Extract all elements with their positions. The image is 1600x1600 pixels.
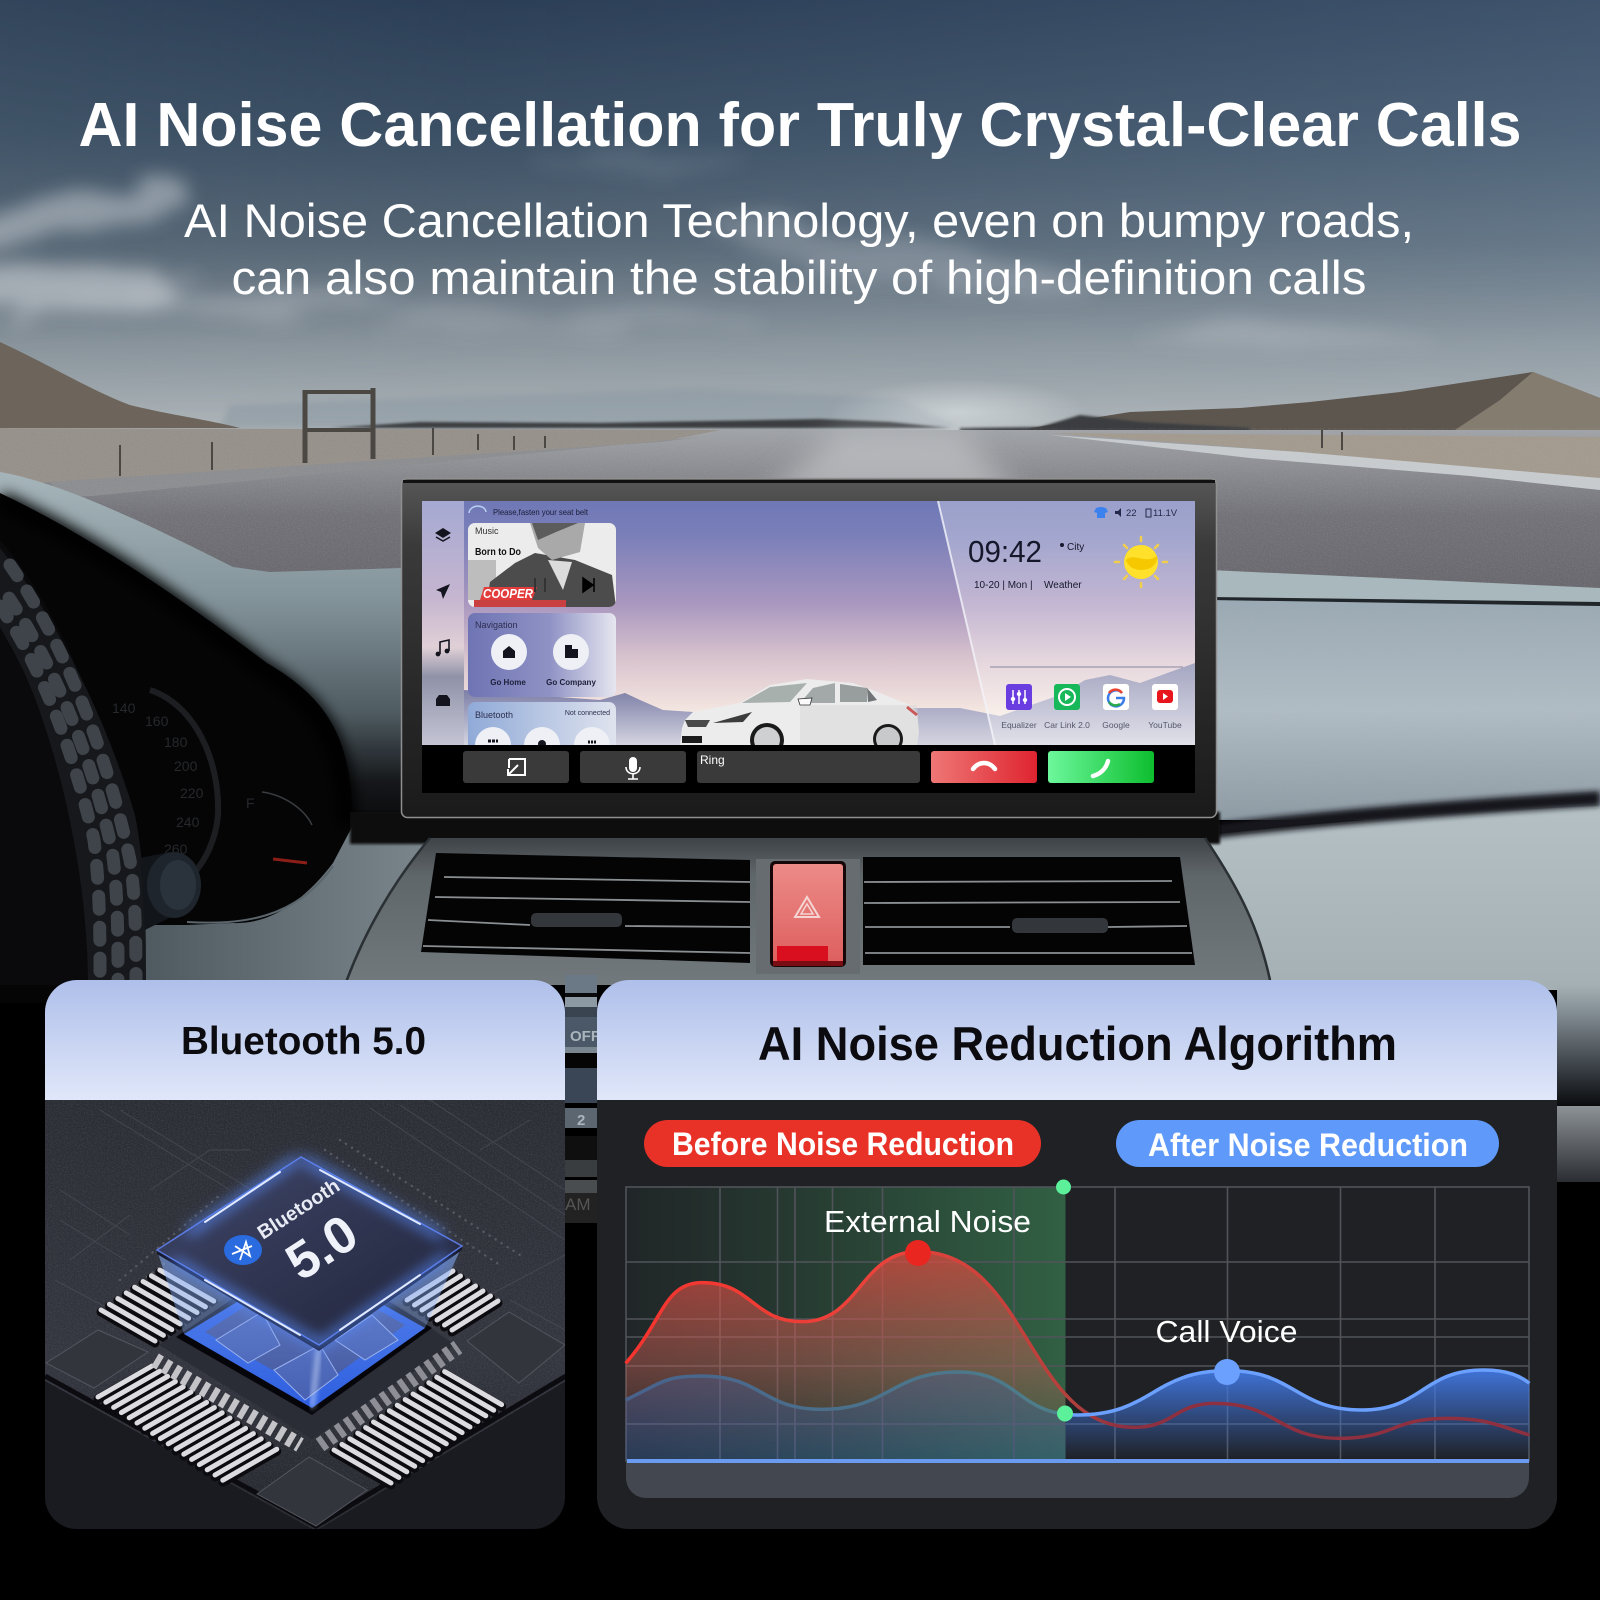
car display device	[402, 478, 1216, 818]
subtitle: AI Noise Cancellation Technology, even on bumpy roads,	[184, 194, 1414, 247]
stalk knob	[140, 852, 201, 930]
clock and weather: 10-20 | Mon |	[974, 580, 1033, 591]
main title: AI Noise Cancellation for Truly Crystal-Clear Calls	[78, 91, 1522, 160]
gauge arc and fuel	[150, 690, 333, 923]
speedometer markings: 160	[145, 713, 169, 729]
bluetooth header	[45, 980, 565, 1100]
lower console between the cards: AM	[565, 1195, 590, 1214]
left field and curb	[0, 428, 720, 487]
app labels: Equalizer	[1001, 720, 1037, 730]
divider	[990, 666, 1183, 668]
speedometer markings: 240	[176, 814, 200, 830]
speedometer markings: 260	[164, 841, 188, 857]
clock and weather: Weather	[1044, 580, 1082, 591]
music card	[468, 523, 616, 607]
call voice label	[1156, 1314, 1298, 1385]
base chip frame	[160, 1298, 452, 1438]
background photo: sky and landscape	[0, 0, 1600, 620]
tree line	[330, 415, 1250, 436]
after pill	[1116, 1120, 1499, 1167]
external noise label	[824, 1204, 1031, 1266]
subtitle	[184, 194, 1414, 304]
ring status field	[697, 751, 920, 783]
bluetooth header: Bluetooth 5.0	[181, 1020, 426, 1063]
right side fade	[1557, 985, 1600, 1182]
translucent right panel	[938, 501, 1195, 745]
bluetooth card	[468, 702, 616, 745]
cast button	[463, 751, 569, 783]
app labels	[1002, 722, 1182, 730]
steering wheel	[0, 540, 146, 985]
fence	[120, 388, 1342, 476]
vent frame	[345, 838, 1271, 985]
road	[0, 430, 1600, 620]
screen wallpaper	[422, 501, 1195, 763]
left air vent	[421, 853, 750, 963]
green comparison zone	[626, 1187, 1066, 1461]
chip illustration	[45, 1100, 566, 1531]
right top trim	[1210, 570, 1600, 606]
status bar	[1094, 507, 1178, 519]
sidebar icons	[435, 528, 451, 706]
blue die	[184, 1302, 425, 1408]
answer call button	[1048, 751, 1154, 783]
panel: AI Noise Reduction Algorithm	[597, 980, 1557, 1529]
app labels: Car Link 2.0	[1044, 720, 1090, 730]
sidebar	[422, 501, 464, 745]
call control bar	[422, 745, 1195, 793]
call voice label: Call Voice	[1156, 1314, 1298, 1349]
end call button	[931, 751, 1037, 783]
clock and weather: City	[1067, 542, 1084, 553]
light cones	[157, 1250, 319, 1408]
speedometer markings: 180	[164, 734, 188, 750]
bezel	[402, 478, 1216, 818]
chip logo: 5.0	[276, 1204, 368, 1292]
speedometer markings: 140	[112, 700, 136, 716]
lower platform	[45, 1381, 566, 1531]
blue voice area right	[1028, 1370, 1529, 1460]
after pill: After Noise Reduction	[1148, 1127, 1468, 1163]
hazard button	[756, 859, 860, 974]
small chips	[46, 1312, 565, 1526]
panel: Bluetooth 5.0	[45, 980, 566, 1531]
music card: Music	[475, 526, 499, 536]
lower console between the cards: OFF	[570, 1028, 600, 1045]
wallpaper mountains	[464, 690, 700, 745]
speedometer markings: 220	[180, 785, 204, 801]
navigation card: Go Home	[490, 678, 526, 687]
red noise area	[626, 1252, 1134, 1460]
sedan car	[680, 679, 919, 745]
navigation card	[468, 613, 616, 697]
baseline	[627, 1459, 1529, 1463]
distant fog trees	[220, 388, 960, 428]
app labels: Google	[1102, 720, 1130, 730]
app labels: YouTube	[1148, 720, 1182, 730]
lower left dash	[143, 817, 440, 985]
right hills	[1030, 372, 1600, 440]
red noise curve	[626, 1252, 1529, 1438]
dashboard photo	[0, 472, 1600, 1223]
lower console between the cards	[565, 975, 600, 1223]
silver pins	[98, 1270, 502, 1485]
chart base	[626, 1461, 1529, 1498]
music card: Born to Do	[475, 547, 521, 558]
status bar: 22	[1126, 508, 1137, 519]
clock and weather: 09:42	[968, 534, 1042, 569]
blue voice curve	[626, 1370, 1529, 1415]
sun icon	[1115, 537, 1167, 587]
music card: COOPER	[483, 587, 533, 601]
instrument hood shadow	[0, 493, 353, 1003]
bluetooth card: Bluetooth	[475, 710, 513, 720]
speedometer markings: F	[246, 795, 255, 811]
dark recess below screen	[350, 812, 1220, 844]
bluetooth card: Not connected	[565, 710, 610, 717]
blue voice area left	[626, 1372, 1078, 1460]
clock and weather	[969, 540, 1084, 590]
navigation card: Go Company	[546, 678, 596, 687]
right dash panel	[1210, 600, 1600, 820]
speedometer markings	[112, 700, 255, 857]
chip logo: Bluetooth	[254, 1175, 344, 1244]
app icons	[1006, 684, 1178, 710]
ring status field: Ring	[700, 753, 725, 767]
status bar: 11.1V	[1153, 508, 1178, 519]
algorithm header	[597, 980, 1557, 1100]
green markers	[1056, 1180, 1073, 1422]
noise chart	[626, 1180, 1529, 1498]
right dash lower panel	[1200, 806, 1600, 990]
right field and shoulder	[1050, 433, 1600, 480]
right air vent	[863, 857, 1195, 965]
external noise label: External Noise	[824, 1204, 1031, 1239]
panel body	[597, 1090, 1557, 1529]
before pill: Before Noise Reduction	[672, 1126, 1014, 1162]
microphone button	[580, 751, 686, 783]
chip logo	[224, 1182, 355, 1278]
seat belt notice	[469, 506, 589, 517]
navigation card: Navigation	[475, 620, 518, 630]
algorithm header: AI Noise Reduction Algorithm	[758, 1017, 1397, 1070]
hood leather	[0, 472, 402, 825]
chip top	[157, 1246, 462, 1351]
subtitle: can also maintain the stability of high-definition calls	[232, 251, 1366, 304]
lower console between the cards: 2	[577, 1112, 585, 1129]
seat belt notice: Please,fasten your seat belt	[493, 507, 589, 517]
left hill	[0, 342, 240, 428]
before pill	[644, 1120, 1041, 1167]
speedometer markings: 200	[174, 758, 198, 774]
chip glow	[175, 1160, 445, 1345]
